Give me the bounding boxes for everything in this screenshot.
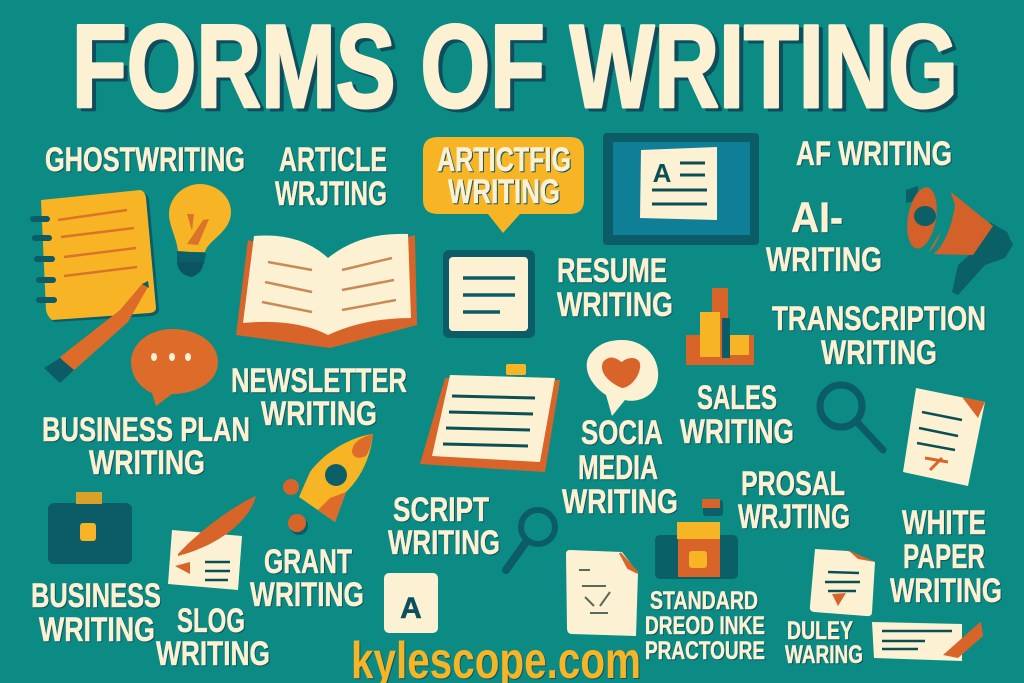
label: duley waring [785,617,863,669]
icon: page with corner [566,550,638,636]
icon: marked paper [903,388,985,486]
label: white paper writing: PAPER [903,538,985,576]
icon: light bulb [169,184,231,277]
label: slog writing: WRITING [156,635,270,673]
callout: speech bubble label [423,137,584,233]
icon: clipboard document [420,364,560,472]
label: slog writing [156,602,270,673]
icon: bar chart [686,288,754,365]
label: newsletter writing: WRITING [261,395,377,433]
label: article writing [275,141,387,213]
icon: briefcase [48,492,132,564]
icon: note and quill [168,496,256,590]
label: business plan writing: WRITING [89,444,205,482]
icon: monitor with document: A [653,158,672,188]
label: social media writing: SOCIA [581,414,663,452]
icon: pencil [44,281,149,383]
label: standard dreod inke practoure: DREOD INKE [645,612,765,640]
label: social media writing: MEDIA [578,449,658,487]
icon: megaphone [903,185,1013,295]
label: social media writing: WRITING [562,483,678,521]
label: transcription writing [772,300,986,372]
icon: small document [810,549,875,616]
label: grant writing: WRITING [250,576,364,614]
label: grant writing: GRANT [264,543,352,581]
label: transcription writing: WRITING [821,334,937,372]
label: duley waring: DULEY [787,617,853,645]
label: prosal writing [738,465,850,536]
label: ai writing: WRITING [766,241,882,279]
label: white paper writing: WHITE [902,504,986,542]
label: newsletter writing [231,362,407,433]
label: ai writing: AI- [791,194,843,242]
icon: magnifying glass small [506,510,555,570]
label: article writing: ARTICLE [279,141,387,179]
label: standard dreod inke practoure: STANDARD [650,587,758,615]
label: business plan writing [42,411,250,482]
label: ghostwriting: GHOSTWRITING [45,141,245,179]
label: prosal writing: WRJTING [738,498,850,536]
label: business writing: WRITING [39,611,155,649]
label: resume writing: WRITING [557,286,673,324]
icon: speech bubble with dots [131,329,218,406]
label: sales writing: WRITING [680,413,794,451]
icon: magnifying glass [820,385,883,450]
label: social media writing [562,414,678,521]
label: resume writing [557,252,673,324]
label: script writing: WRITING [388,524,500,562]
label: af writing: AF WRITING [796,135,952,173]
icon: monitor with document [603,133,759,245]
icon: rocket [283,434,373,535]
label: business plan writing: BUSINESS PLAN [42,411,250,449]
label: ai writing [766,194,882,279]
label: script writing [388,491,500,562]
label: sales writing: SALES [697,379,777,417]
icon: notepad [33,190,159,322]
icon: letter card: A [400,592,422,625]
label: standard dreod inke practoure: PRACTOURE [645,637,765,665]
icon: open book [236,234,417,348]
icon: social heart bubble [587,340,658,416]
label: grant writing [250,543,364,614]
icon: slip and pen [872,622,983,661]
callout: speech bubble label: ARTICTFIG [437,141,571,179]
label: sales writing [680,379,794,451]
label: newsletter writing: NEWSLETTER [231,362,407,400]
icon: letter card [384,573,438,633]
label: resume writing: RESUME [557,252,667,290]
label: white paper writing [890,504,1002,610]
label: article writing: WRJTING [275,175,387,213]
label: duley waring: WARING [785,641,863,669]
label: business writing: BUSINESS [31,577,161,615]
callout: speech bubble label: WRITING [448,173,560,211]
icon: document card [443,250,535,338]
label: business writing [31,577,161,649]
icon: yellow briefcase [655,499,738,579]
label: script writing: SCRIPT [393,491,489,529]
label: prosal writing: PROSAL [741,465,845,503]
label: standard dreod inke practoure [645,587,765,665]
label: slog writing: SLOG [177,602,245,640]
